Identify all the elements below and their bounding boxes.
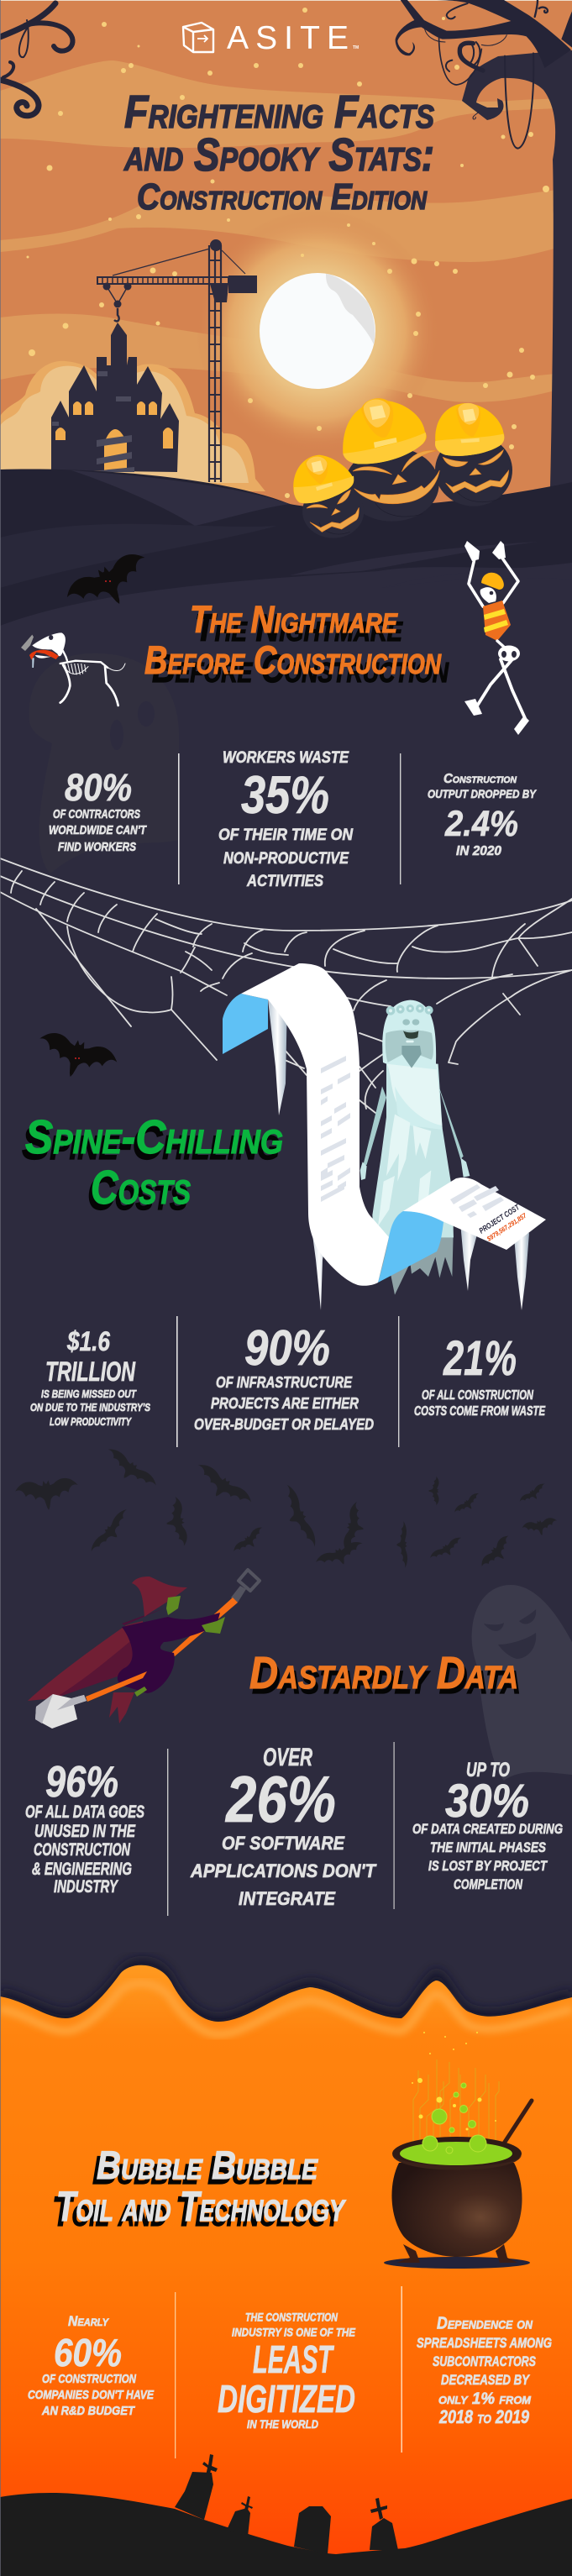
stat: nearly 60%: 60% [54,2331,122,2374]
stat: 21% [414,1331,545,1419]
stat: $1.6 trillion: TRILLION [45,1356,136,1387]
stat: 80%: OF CONTRACTORS [53,808,140,821]
stat: 90%: OVER-BUDGET OR DELAYED [194,1416,374,1433]
stat: nearly 60% [28,2313,155,2418]
scroll: project cost bill: PROJECT COST [478,1203,522,1236]
icon: skeleton worker [464,541,529,735]
stat: 26% [190,1744,376,1909]
divider [176,1316,178,1447]
icicles [268,997,529,1310]
heading: Bubble Bubble Toil and Technology: Toil and Technology [52,2188,342,2235]
heading: Bubble Bubble Toil and Technology: Bubble Bubble [97,2143,318,2187]
stat: 26%: APPLICATIONS DON'T [190,1860,376,1881]
stat: 90% [194,1320,374,1433]
divider [393,1742,395,1909]
stat: 30%: UP TO [466,1759,510,1781]
stat: nearly 60%: AN R&D BUDGET [41,2404,136,2418]
stat: dependence on spreadsheets: Dependence on [437,2315,533,2333]
divider [400,753,401,884]
stat: 90%: PROJECTS ARE EITHER [211,1395,359,1412]
stat: 21%: 21% [443,1331,517,1386]
cauldron with bubbling green brew [384,2032,532,2269]
stat: 2.4%: OUTPUT DROPPED BY [428,787,537,800]
ghost bride [360,1000,470,1295]
hill [0,469,572,626]
stat: least digitized: THE CONSTRUCTION [245,2310,338,2323]
divider [401,2286,402,2453]
scroll: project cost bill [223,963,546,1286]
stat: 30%: COMPLETION [454,1876,523,1892]
witch on flying shovel [28,1570,260,1729]
title [123,86,434,218]
heading: The Nightmare Before Construction: The Nightmare [195,606,403,649]
heading: Spine-Chilling Costs: Costs [87,1167,187,1220]
heading: Bubble Bubble Toil and Technology: Toil and Technology [56,2183,346,2230]
stat: 96%: & ENGINEERING [32,1860,132,1879]
stat: least digitized: LEAST [253,2337,334,2381]
icon: skeleton dog with hammer [21,632,125,706]
stat: 35%: OF THEIR TIME ON [218,826,354,844]
divider [167,1749,168,1916]
clouds behind castle [0,361,265,491]
icon: black bat top [62,548,158,624]
stat: $1.6 trillion [30,1326,150,1428]
heading: The Nightmare Before Construction [144,598,449,690]
scroll: project cost bill: $979,567,291,857 [485,1211,528,1243]
pumpkin: large with helmet [343,398,439,504]
stat: 2.4% [428,772,537,858]
stat: dependence on spreadsheets: DECREASED BY [441,2372,530,2388]
heading: Dastardly Data: Dastardly Data [249,1648,518,1698]
stat: nearly 60%: OF CONSTRUCTION [42,2372,137,2386]
heading: The Nightmare Before Construction: The Nightmare [190,598,398,641]
heading: The Nightmare Before Construction: Before Construction [144,637,442,682]
logo: ASITE [183,20,359,56]
icon: black bat middle [32,1029,120,1089]
ghost: left faint [29,653,179,874]
divider [178,753,180,884]
pumpkin: right with helmet [435,403,509,493]
stat: 35%: NON-PRODUCTIVE [223,850,349,868]
stat: 35%: ACTIVITIES [246,873,323,890]
stat: 26%: OVER [263,1744,312,1771]
heading: Bubble Bubble Toil and Technology: Bubble Bubble [92,2148,314,2192]
stat: least digitized: DIGITIZED [218,2377,355,2421]
stat: 35%: 35% [241,766,329,825]
stat: 96%: 96% [45,1758,118,1807]
stat: 96% [25,1758,144,1897]
stat: least digitized: IN THE WORLD [247,2417,318,2431]
stat: least digitized: INDUSTRY IS ONE OF THE [232,2325,356,2338]
ghost: right [472,1585,572,1781]
crane [97,239,257,482]
stat: least digitized [218,2310,356,2431]
heading: Dastardly Data: Dastardly Data [252,1653,521,1703]
stat: 80%: WORLDWIDE CAN'T [49,824,147,837]
stat: 30% [412,1759,563,1892]
heading: Bubble Bubble Toil and Technology [52,2143,346,2235]
stat: nearly 60%: Nearly [68,2313,109,2329]
stat: 35% [218,749,354,890]
title: and Spooky Stats: [123,129,434,181]
stat: 96%: UNUSED IN THE [34,1822,136,1841]
heading: Spine-Chilling Costs: Spine-Chilling [22,1116,280,1170]
stat: $1.6 trillion: $1.6 [66,1326,110,1356]
logo: ASITE: TM [353,45,359,50]
stat: nearly 60%: COMPANIES DON'T HAVE [28,2388,155,2402]
stat: $1.6 trillion: LOW PRODUCTIVITY [50,1415,132,1428]
stat: 30%: 30% [445,1774,529,1827]
stat: 26%: 26% [224,1762,336,1836]
stat: 2.4%: 2.4% [444,804,518,844]
divider [398,1316,399,1447]
stat: 80%: FIND WORKERS [58,841,136,854]
tree: right [396,0,572,489]
title: Frightening Facts [124,86,434,138]
stat: 2.4%: Construction [443,772,517,786]
stat: 80% [49,766,147,854]
graveyard silhouette [0,2454,572,2576]
stat: 96%: INDUSTRY [54,1877,118,1897]
stat: 90%: 90% [244,1320,330,1376]
stat: 96%: OF ALL DATA GOES [25,1802,144,1822]
stat: dependence on spreadsheets [417,2315,552,2427]
panel: orange section with goo [0,1960,572,2576]
heading: Spine-Chilling Costs [22,1110,283,1220]
moon [260,273,375,389]
stat: 2.4%: IN 2020 [456,844,501,858]
stat: $1.6 trillion: IS BEING MISSED OUT [41,1388,137,1400]
logo: ASITE: ASITE [227,20,349,56]
heading: The Nightmare Before Construction: Before Construction [152,646,449,690]
heading: Spine-Chilling Costs: Spine-Chilling [25,1110,283,1164]
stat: $1.6 trillion: ON DUE TO THE INDUSTRY'S [30,1401,150,1414]
stat: 26%: OF SOFTWARE [222,1833,345,1854]
stat: 21%: OF ALL CONSTRUCTION [422,1388,534,1403]
stat: 35%: WORKERS WASTE [223,749,349,767]
stat: dependence on spreadsheets: only 1% from [438,2390,532,2408]
pumpkin: small with helmet [293,455,359,532]
branches: top-left [0,3,73,116]
stat: 80%: 80% [65,766,132,809]
stat: dependence on spreadsheets: SUBCONTRACTORS [433,2353,536,2369]
stat: dependence on spreadsheets: 2018 to 2019 [438,2406,530,2427]
left edge line [0,0,1,2576]
heading: Spine-Chilling Costs: Costs [91,1161,191,1215]
stars [8,8,549,498]
panel: header sky [0,0,572,512]
bat swarm [14,1445,559,1574]
castle [51,323,179,472]
stat: 26%: INTEGRATE [239,1888,336,1909]
divider [175,2292,176,2458]
title: Construction Edition [137,176,428,218]
stat: 90%: OF INFRASTRUCTURE [216,1374,353,1391]
spider web [0,858,572,1113]
stat: 96%: CONSTRUCTION [34,1840,131,1860]
pumpkins with hard hats [293,398,512,538]
stat: 30%: THE INITIAL PHASES [430,1839,547,1855]
